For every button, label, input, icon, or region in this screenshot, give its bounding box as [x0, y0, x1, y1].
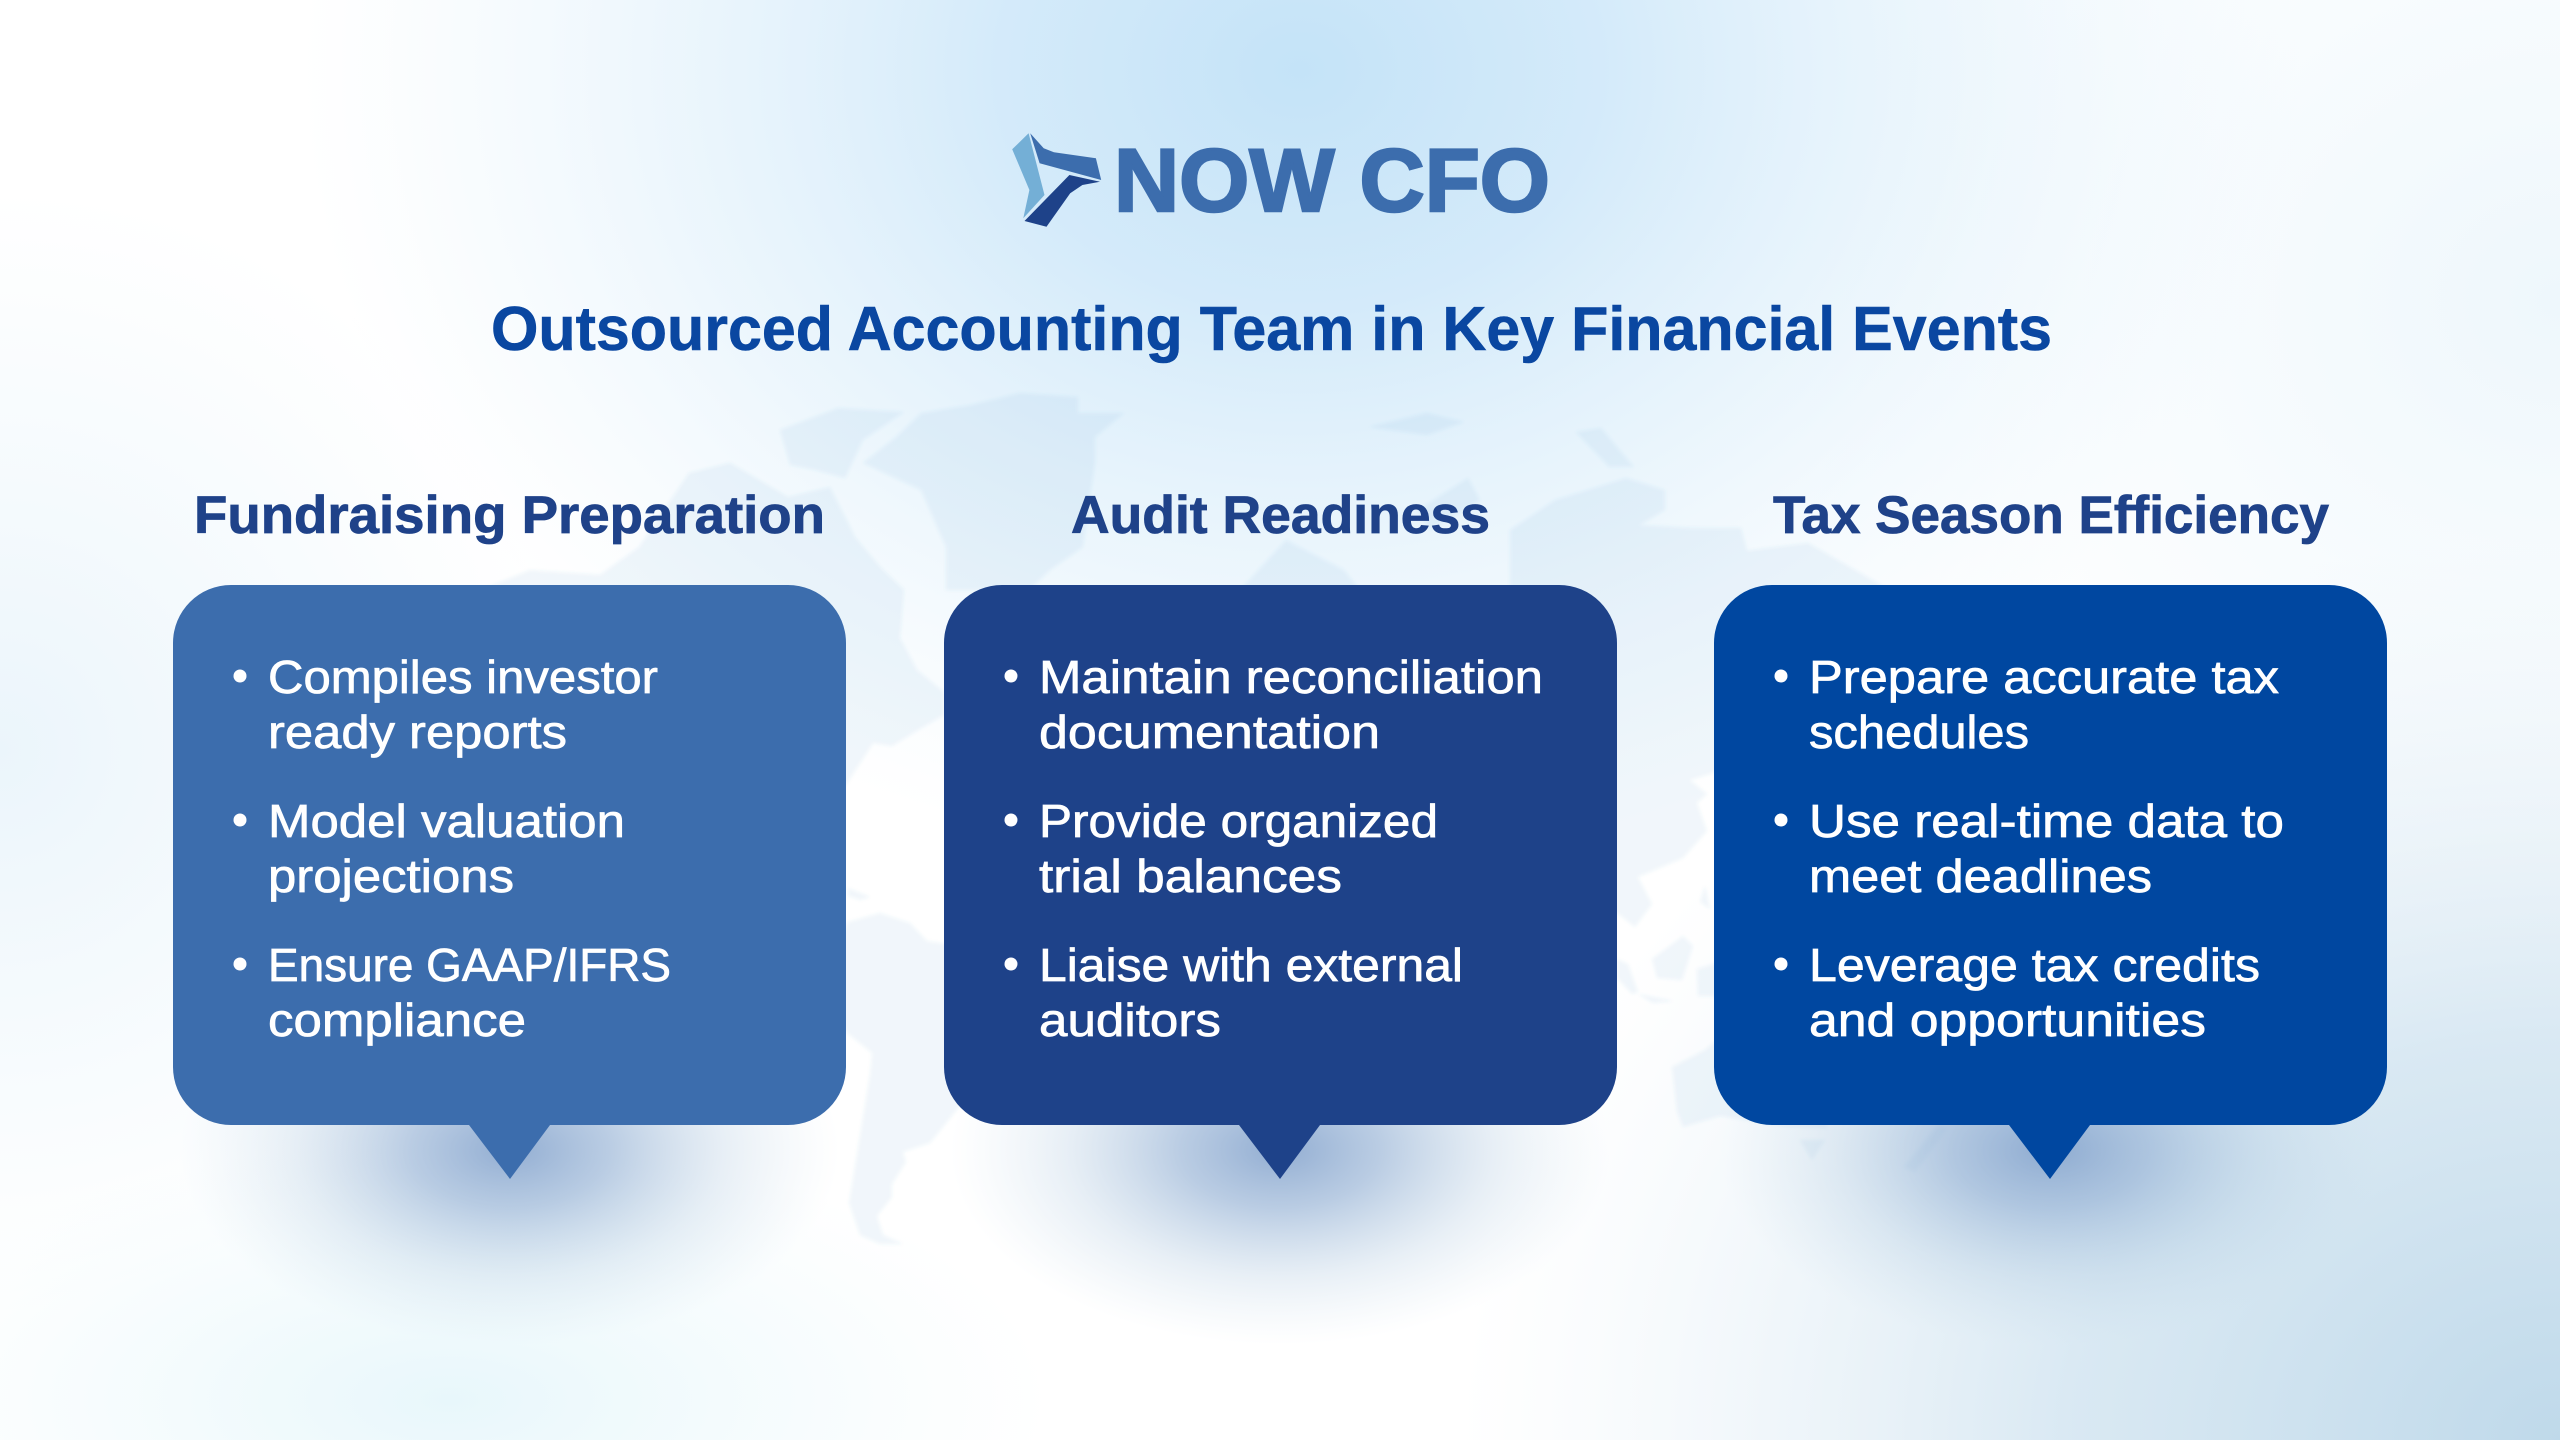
bullet list: Provide organized — [1039, 795, 1438, 847]
bullet list: auditors — [1039, 994, 1221, 1046]
bullet list: Compiles investor — [268, 651, 658, 703]
title: Outsourced Accounting Team in Key Financial Events — [491, 295, 2052, 364]
speech bubble card — [1714, 585, 2387, 1179]
bullet list: documentation — [1039, 706, 1380, 758]
bullet list: Prepare accurate tax — [1809, 651, 2279, 703]
panel: audit readiness — [944, 486, 1617, 1179]
logo wordmark: NOW CFO — [1114, 130, 1550, 230]
speech bubble card — [173, 585, 846, 1179]
bullet list: compliance — [268, 994, 526, 1046]
world map watermark — [481, 393, 1948, 1244]
panel: fundraising preparation — [173, 486, 846, 1179]
panel: tax season efficiency — [1714, 486, 2387, 1179]
bullet list: Ensure GAAP/IFRS — [268, 939, 671, 991]
bullet list: and opportunities — [1809, 994, 2206, 1046]
heading: audit readiness: Audit Readiness — [1071, 486, 1490, 545]
bullet list: meet deadlines — [1809, 850, 2152, 902]
card 3 shadow — [1720, 955, 2380, 1345]
bullet list: projections — [268, 850, 514, 902]
heading: tax season efficiency: Tax Season Efficiency — [1773, 486, 2330, 545]
bullet list: Leverage tax credits — [1809, 939, 2260, 991]
bullet list: Use real-time data to — [1809, 795, 2284, 847]
bullet list: Model valuation — [268, 795, 625, 847]
bullet list — [1004, 651, 1543, 1046]
bullet list: ready reports — [268, 706, 567, 758]
bullet list — [234, 651, 671, 1046]
bullet list: Maintain reconciliation — [1039, 651, 1543, 703]
heading: fundraising preparation: Fundraising Preparation — [194, 486, 825, 545]
speech bubble card — [944, 585, 1617, 1179]
icon: logo arrow mark — [1012, 133, 1101, 227]
bullet list: schedules — [1809, 706, 2029, 758]
bullet list — [1774, 651, 2284, 1046]
bullet list: Liaise with external — [1039, 939, 1463, 991]
bullet list: trial balances — [1039, 850, 1342, 902]
card 2 shadow — [950, 955, 1610, 1345]
logo — [1012, 130, 1550, 230]
card 1 shadow — [180, 955, 840, 1345]
